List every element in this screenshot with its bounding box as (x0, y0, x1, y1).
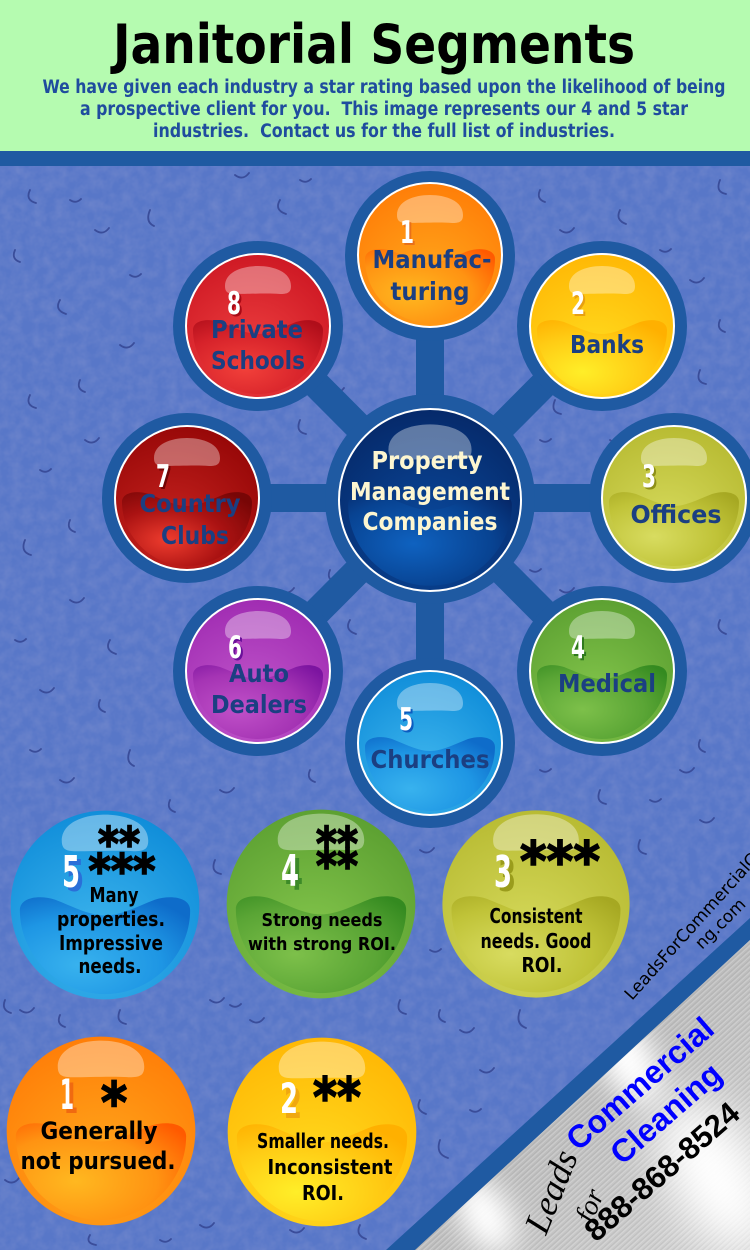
bubble: 8 Private Schools (186, 254, 330, 398)
intro text: We have given each industry a star rating based upon the likelihood of being (42, 77, 726, 98)
legend: 2 stars: ROI. (302, 1181, 344, 1205)
bubble: 6 Auto Dealers: 6 (230, 632, 244, 668)
bubble: 5 Churches: Churches (370, 745, 490, 774)
brand script: Leads for: for (570, 1185, 611, 1227)
bubble: 3 Offices (602, 426, 746, 570)
legend: 1 star: 1 (64, 1074, 78, 1123)
bubble: 4 Medical (530, 599, 674, 743)
legend: 4 stars: Strong needs (262, 910, 382, 931)
bubble: 2 Banks (530, 254, 674, 398)
bubble: 7 Country Clubs: 7 (156, 459, 170, 495)
legend: 4 stars (227, 810, 415, 998)
phone number: 888-868-8524 (578, 1095, 747, 1248)
legend: 3 stars: 3 (494, 847, 512, 898)
legend: 3 stars: *** (520, 830, 600, 893)
bubble: 5 Churches: 5 (401, 704, 415, 740)
legend: 3 stars: Consistent (490, 904, 583, 928)
bubble: 1 Manufacturing: 1 (400, 215, 414, 251)
legend: 1 star: * (101, 1071, 127, 1136)
brand script: Leads for: Leads (516, 1144, 586, 1240)
legend: 2 stars: Smaller needs. (257, 1129, 389, 1153)
legend: 2 stars (228, 1038, 416, 1226)
legend: 5 stars: properties. (57, 907, 165, 931)
bubble: 1 Manufacturing: 1 (402, 217, 416, 253)
legend: 1 star: 1 (60, 1070, 74, 1119)
bubble: 6 Auto Dealers: 6 (228, 630, 242, 666)
bubble: 2 Banks: 2 (573, 288, 587, 324)
intro text: industries. Contact us for the full list of industries. (153, 121, 615, 142)
title: Janitorial Segments (110, 13, 635, 76)
center bubble: Property Management Companies (339, 409, 521, 591)
bubble: 2 Banks: Banks (570, 330, 644, 359)
bubble: 7 Country Clubs (115, 426, 259, 570)
legend: 4 stars: ** (316, 817, 358, 871)
legend: 5 stars: Many (90, 883, 139, 907)
silver corner banner (386, 918, 750, 1250)
legend: 1 star: Generally (40, 1117, 158, 1145)
legend: 4 stars: 4 (281, 846, 299, 897)
bubble: 3 Offices: Offices (630, 500, 722, 529)
bubble: 5 Churches (358, 671, 502, 815)
bubble: 4 Medical: 4 (573, 632, 587, 668)
brand name: Commercial Cleaning: Cleaning (603, 1055, 729, 1171)
website text: ng.com (691, 895, 750, 954)
bubble: 1 Manufacturing (358, 183, 502, 327)
bubble: 1 Manufacturing: Manufac- (372, 245, 492, 274)
legend: 5 stars: Impressive (59, 931, 163, 955)
bubble: 6 Auto Dealers: Dealers (211, 690, 307, 719)
legend: 2 stars: 2 (284, 1079, 302, 1128)
center bubble: Property Management Companies: Property (372, 446, 483, 475)
intro text (42, 77, 726, 142)
bubble: 2 Banks: 2 (571, 286, 585, 322)
legend: 5 stars: 5 (62, 847, 80, 898)
legend: 1 star (7, 1037, 195, 1225)
bubble: 6 Auto Dealers: Auto (229, 659, 289, 688)
bubble: 1 Manufacturing: turing (390, 277, 470, 306)
bubble: 7 Country Clubs: 7 (158, 461, 172, 497)
bubble: 8 Private Schools: Schools (211, 346, 305, 375)
center bubble: Property Management Companies: Companies (362, 507, 498, 536)
bubble: 4 Medical: Medical (558, 669, 656, 698)
bubble: 8 Private Schools: Private (211, 315, 303, 344)
legend: 5 stars: needs. (78, 954, 142, 978)
legend: 3 stars: needs. Good (480, 929, 592, 953)
legend: 2 stars: 2 (280, 1074, 298, 1123)
legend: 4 stars: with strong ROI. (248, 934, 396, 955)
legend: 4 stars: ** (316, 839, 358, 893)
legend: 5 stars: ** (98, 817, 140, 871)
legend: 5 stars: *** (88, 844, 156, 898)
legend: 4 stars: 4 (285, 850, 303, 901)
bubble: 6 Auto Dealers (186, 599, 330, 743)
center bubble: Property Management Companies: Management (350, 477, 510, 506)
brand name: Commercial Cleaning: Commercial (559, 1010, 721, 1157)
bubble: 7 Country Clubs: Clubs (161, 521, 229, 550)
legend: 1 star: not pursued. (20, 1147, 176, 1175)
legend: 2 stars: Inconsistent (268, 1155, 393, 1179)
legend: 5 stars: 5 (66, 851, 84, 902)
bubble: 8 Private Schools: 8 (227, 286, 241, 322)
bubble: 8 Private Schools: 8 (229, 288, 243, 324)
legend: 3 stars: ROI. (522, 953, 562, 977)
bubble: 3 Offices: 3 (644, 461, 658, 497)
legend: 5 stars (11, 811, 199, 999)
bubble: 5 Churches: 5 (399, 702, 413, 738)
intro text: a prospective client for you. This image represents our 4 and 5 star (80, 99, 689, 120)
header panel (0, 0, 750, 166)
legend: 2 stars: ** (313, 1066, 361, 1129)
legend: 3 stars (442, 810, 630, 998)
bubble: 7 Country Clubs: Country (140, 489, 241, 518)
bubble: 4 Medical: 4 (571, 630, 585, 666)
hub connectors and rings (102, 171, 750, 828)
legend: 3 stars: 3 (498, 851, 516, 902)
bubble: 3 Offices: 3 (642, 459, 656, 495)
